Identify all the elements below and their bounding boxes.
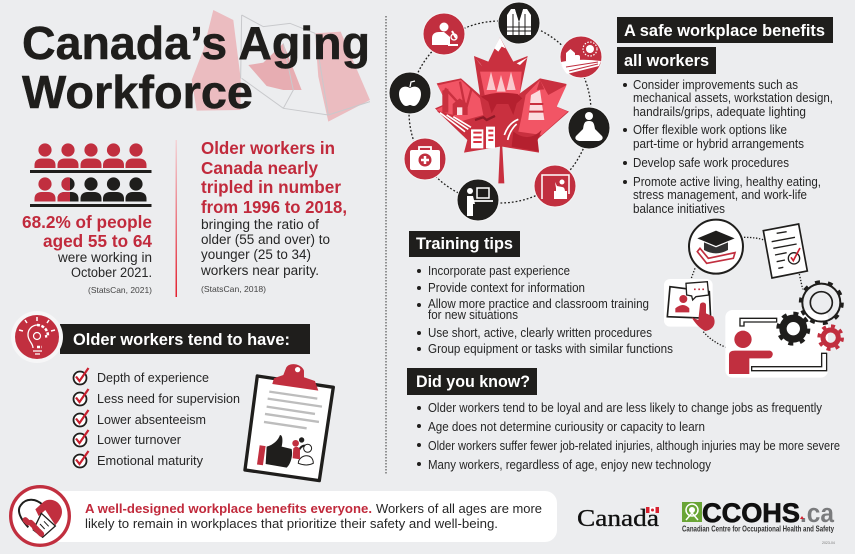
list: workplace benefits [623,77,833,216]
icon: instructor at board [534,165,576,207]
stat text: 68.2 percent working [22,212,152,295]
stat text: 68.2 percent working: aged 55 to 64 [43,231,152,251]
heading: training tips: Training tips [416,234,513,253]
icon: meditating person [568,107,610,149]
list: workplace benefits: mechanical assets, workstation design, [633,90,833,105]
stat text: older workers tripled: (StatsCan, 2018) [201,284,266,294]
icon: online learning [664,279,715,331]
title [22,17,370,118]
list: training tips: Use short, active, clearly written procedures [428,325,652,340]
list: training tips [417,263,673,356]
callout: well-designed workplace: Workers of all ages are more [376,501,542,516]
heading: did you know: Did you know? [416,372,530,391]
heading: safe workplace benefits [617,17,833,74]
icon: light bulb and gear [11,311,63,363]
icon: graduation cap [689,220,743,274]
stat text: 68.2 percent working: were working in [57,250,152,265]
stat text: older workers tripled: from 1996 to 2018, [201,197,347,217]
icon: certificate [763,224,807,278]
logo: CCOHS: 2023-04 [822,541,835,545]
check item: Lower absenteeism [97,412,206,427]
list: workplace benefits: Promote active living, healthy eating, [633,174,821,189]
logo: CCOHS [682,498,835,545]
check item: Depth of experience [97,370,209,385]
callout: well-designed workplace: likely to remain in workplaces that prioritize their safety and well-being. [85,516,498,531]
check item: Lower turnover [97,432,182,447]
icon: black gear [778,314,808,344]
logo: Canada wordmark: Canada [577,506,659,532]
list: training tips: Provide context for information [428,280,585,295]
list: training tips: for new situations [428,307,518,322]
stat text: older workers tripled: younger (25 to 34) [201,247,311,262]
list: workplace benefits: part-time or hybrid arrangements [633,136,804,151]
stat text: older workers tripled: workers near parity. [200,263,319,278]
stat text: older workers tripled: Canada nearly [201,158,318,178]
list: workplace benefits: Develop safe work procedures [633,155,789,170]
list: training tips: Incorporate past experience [428,263,570,278]
training icons cluster [664,220,842,378]
icon: lab worker with microscope [423,13,465,55]
heading: safe workplace benefits: all workers [624,51,709,70]
heading: older workers tend to have: Older workers tend to have: [73,330,290,349]
callout: well-designed workplace [40,491,557,542]
list: workplace benefits: handrails/grips, adequate lighting [633,104,806,119]
list: did you know: Many workers, regardless of age, enjoy new technology [428,457,712,472]
list: workplace benefits: Consider improvements such as [633,77,798,92]
heading: older workers tend to have [60,324,310,354]
check item: Less need for supervision [97,391,240,406]
heading: training tips [409,231,520,257]
list: did you know [417,400,840,472]
list: training tips: Group equipment or tasks with similar functions [428,341,673,356]
icon: handshake heart [11,487,69,545]
callout: well-designed workplace: A well-designed workplace benefits everyone. [85,501,372,516]
heading: safe workplace benefits: A safe workplace benefits [624,21,825,40]
icon: clipboard [245,364,333,481]
icon: person at computer [457,179,499,221]
icon: apple [389,72,431,114]
list: workplace benefits: Offer flexible work options like [633,122,787,137]
list: did you know: Older workers tend to be loyal and are less likely to change jobs as frequently [428,400,823,415]
check item [74,430,182,447]
stat text: 68.2 percent working: October 2021. [71,265,152,280]
dotted ring and safety icons [389,2,610,221]
checklist: older worker traits [74,368,240,468]
list: workplace benefits: stress management, and work-life [633,187,807,202]
stat text: 68.2 percent working: 68.2% of people [22,212,152,232]
list: did you know: Age does not determine curiousity or capacity to learn [428,419,705,434]
stat text: older workers tripled: older (55 and over) to [201,232,330,247]
people pictogram: 68.2 percent [30,143,152,207]
icon: first aid kit [404,138,446,180]
background flag illustration [192,10,370,122]
heading: did you know [407,368,537,395]
stat text: older workers tripled [200,138,347,294]
check item: Emotional maturity [97,453,204,468]
title: Canada’s Aging [22,17,370,69]
icon: presenter board [725,310,828,378]
stat text: older workers tripled: tripled in number [201,177,341,197]
icon: outline gear [800,282,842,324]
icon: high-visibility vest [498,2,540,44]
stat text: older workers tripled: Older workers in [201,138,335,158]
title: Workforce [22,66,253,118]
icon: red gear [819,326,842,349]
logo: CCOHS: CCOHS [702,498,800,528]
stat text: older workers tripled: bringing the ratio of [201,217,319,232]
list: training tips: Allow more practice and classroom training [428,296,649,311]
list: workplace benefits: balance initiatives [633,201,725,216]
logo: CCOHS: .ca [800,498,835,528]
maple leaf illustration [435,37,569,183]
stat text: 68.2 percent working: (StatsCan, 2021) [88,285,152,295]
icon: farm and sun [560,36,602,78]
